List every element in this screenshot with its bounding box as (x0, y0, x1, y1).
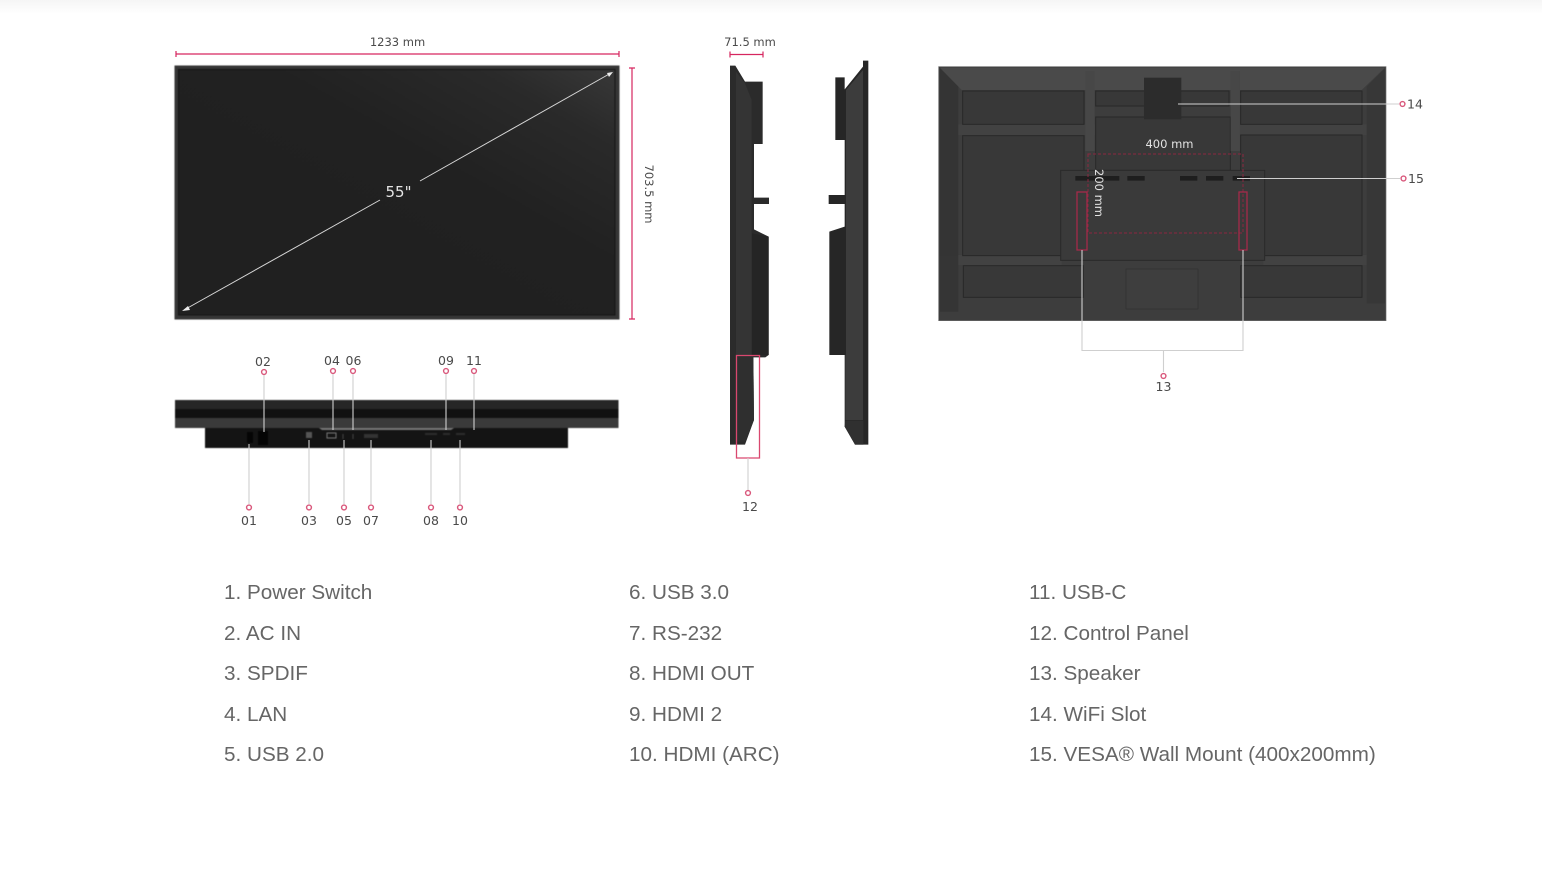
legend column 3: 11. USB-C (1029, 581, 1126, 604)
diagonal arrow with size (182, 72, 613, 311)
left side profile (730, 66, 769, 445)
legend column 1: 5. USB 2.0 (224, 743, 324, 766)
legend column 1: 1. Power Switch (224, 581, 372, 604)
top callouts 02 04 06 09 11: 02 (255, 354, 271, 369)
legend column 1: 4. LAN (224, 702, 287, 726)
top callouts 02 04 06 09 11: 09 (438, 353, 454, 368)
top callouts 02 04 06 09 11 (255, 353, 482, 374)
width dimension (176, 35, 619, 57)
depth dimension: 71.5 mm (724, 35, 776, 49)
right side profile (829, 61, 868, 445)
top callouts 02 04 06 09 11: 06 (346, 353, 361, 368)
bottom view connectors (175, 353, 618, 528)
VESA dimensions: 400 mm (1145, 137, 1194, 151)
legend column 3: 14. WiFi Slot (1029, 702, 1146, 726)
legend column 2: 7. RS-232 (629, 622, 722, 644)
legend column 2 (629, 581, 780, 766)
bottom callouts 01 03 05 07 08 10: 07 (363, 513, 379, 528)
legend column 2: 10. HDMI (ARC) (629, 743, 780, 766)
bottom callouts 01 03 05 07 08 10: 01 (241, 513, 257, 528)
control panel callout 12 (736, 356, 760, 514)
speaker callout 13: 13 (1156, 379, 1171, 394)
bottom callouts 01 03 05 07 08 10: 10 (452, 513, 468, 528)
width dimension: 1233 mm (370, 35, 425, 49)
bottom callouts 01 03 05 07 08 10 (241, 505, 468, 528)
rear view panel (939, 67, 1424, 394)
legend column 3 (1029, 581, 1376, 766)
VESA dimensions: 200 mm (1092, 169, 1106, 217)
display front (174, 66, 620, 320)
bottom callouts 01 03 05 07 08 10: 08 (423, 513, 439, 528)
side views (724, 35, 868, 514)
VESA callout 15 (1237, 171, 1424, 186)
leader lines (249, 374, 474, 504)
WiFi slot callout 14 (1178, 96, 1423, 112)
depth dimension (724, 35, 776, 58)
legend column 3: 15. VESA® Wall Mount (400x200mm) (1029, 743, 1376, 766)
VESA callout 15: 15 (1408, 171, 1424, 186)
legend column 3: 13. Speaker (1029, 662, 1141, 685)
top callouts 02 04 06 09 11: 11 (466, 353, 482, 368)
height dimension (629, 68, 656, 319)
legend column 1 (224, 581, 372, 766)
speaker callout 13 (1077, 192, 1247, 394)
legend column 2: 8. HDMI OUT (629, 662, 754, 685)
WiFi slot callout 14: 14 (1407, 96, 1423, 112)
height dimension: 703.5 mm (642, 165, 656, 223)
legend column 2: 9. HDMI 2 (629, 702, 722, 726)
legend column 1: 3. SPDIF (224, 662, 308, 685)
display rear (939, 67, 1386, 321)
legend column 3: 12. Control Panel (1029, 622, 1189, 644)
legend column 1: 2. AC IN (224, 622, 301, 644)
diagonal arrow with size: 55" (386, 183, 412, 201)
control panel callout 12: 12 (742, 499, 758, 514)
top callouts 02 04 06 09 11: 04 (324, 353, 340, 368)
display bottom edge (175, 400, 618, 448)
legend column 2: 6. USB 3.0 (629, 581, 729, 604)
VESA dimensions (1088, 137, 1243, 233)
bottom callouts 01 03 05 07 08 10: 03 (301, 513, 317, 528)
bottom callouts 01 03 05 07 08 10: 05 (336, 513, 352, 528)
front view panel (174, 35, 656, 320)
